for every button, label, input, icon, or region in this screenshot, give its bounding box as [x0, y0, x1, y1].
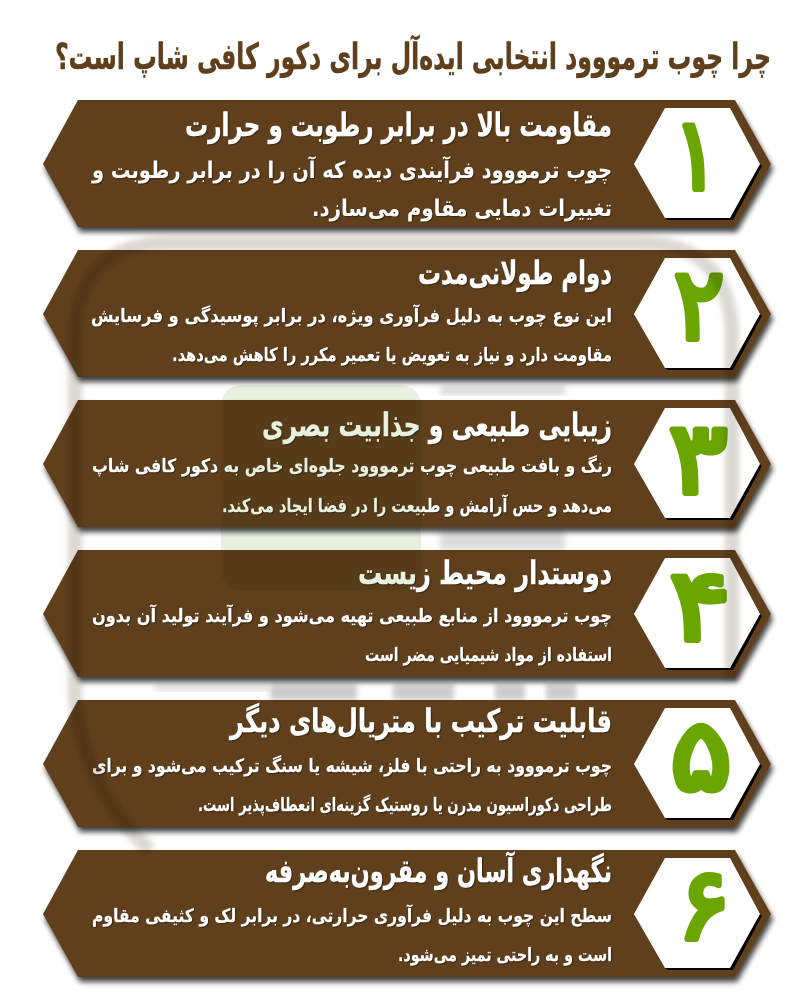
body 3: می‌دهد و حس آرامش و طبیعت را در فضا ایجاد می‌کند. [222, 494, 612, 517]
body 5 [92, 755, 612, 816]
body 6 [92, 904, 612, 966]
number 2: ۲ [673, 247, 725, 364]
body 3 [92, 455, 612, 517]
number 5: ۵ [670, 698, 732, 814]
panel: item 1 [43, 96, 771, 227]
heading 6: نگهداری آسان و مقرون‌به‌صرفه [265, 851, 612, 890]
body 2: مقاومت دارد و نیاز به تعویض یا تعمیر مکرر را کاهش می‌دهد. [172, 345, 612, 366]
heading 2: دوام طولانی‌مدت [418, 254, 612, 292]
panel: item 5 [43, 698, 771, 827]
panel: item 6 [43, 846, 771, 977]
number 4: ۴ [669, 548, 731, 664]
panel: item 4 [43, 548, 771, 677]
panel: item 3 [43, 400, 771, 527]
body 6: سطح این چوب به دلیل فرآوری حرارتی، در برابر لک و کثیفی مقاوم [92, 904, 612, 927]
body 4 [92, 604, 612, 666]
number 1: ۱ [673, 96, 719, 213]
panel: item 2 [43, 247, 771, 377]
body 2 [91, 304, 612, 366]
watermark [75, 243, 732, 850]
number 3: ۳ [668, 400, 728, 517]
body 6: است و به راحتی تمیز می‌شود. [398, 945, 612, 966]
body 1 [91, 155, 612, 222]
body 4: استفاده از مواد شیمیایی مضر است [365, 645, 612, 666]
body 4: چوب ترمووود از منابع طبیعی تهیه می‌شود و فرآیند تولید آن بدون [92, 604, 612, 627]
heading 3: زیبایی طبیعی و جذابیت بصری [262, 406, 612, 444]
body 1: تغییرات دمایی مقاوم می‌سازد. [312, 196, 612, 222]
body 5: چوب ترمووود به راحتی با فلز، شیشه یا سنگ ترکیب می‌شود و برای [92, 755, 612, 777]
body 2: این نوع چوب به دلیل فرآوری ویژه، در برابر پوسیدگی و فرسایش [91, 304, 612, 327]
heading 1: مقاومت بالا در برابر رطوبت و حرارت [185, 106, 612, 144]
number 6: ۶ [677, 846, 731, 963]
body 3: رنگ و بافت طبیعی چوب ترمووود جلوه‌ای خاص به دکور کافی شاپ [92, 455, 612, 477]
heading 5: قابلیت ترکیب با متریال‌های دیگر [228, 702, 612, 740]
heading 4: دوستدار محیط زیست [358, 554, 612, 592]
body 5: طراحی دکوراسیون مدرن یا روستیک گزینه‌ای انعطاف‌پذیر است. [198, 794, 612, 816]
body 1: چوب ترمووود فرآیندی دیده که آن را در برابر رطوبت و [91, 155, 612, 184]
